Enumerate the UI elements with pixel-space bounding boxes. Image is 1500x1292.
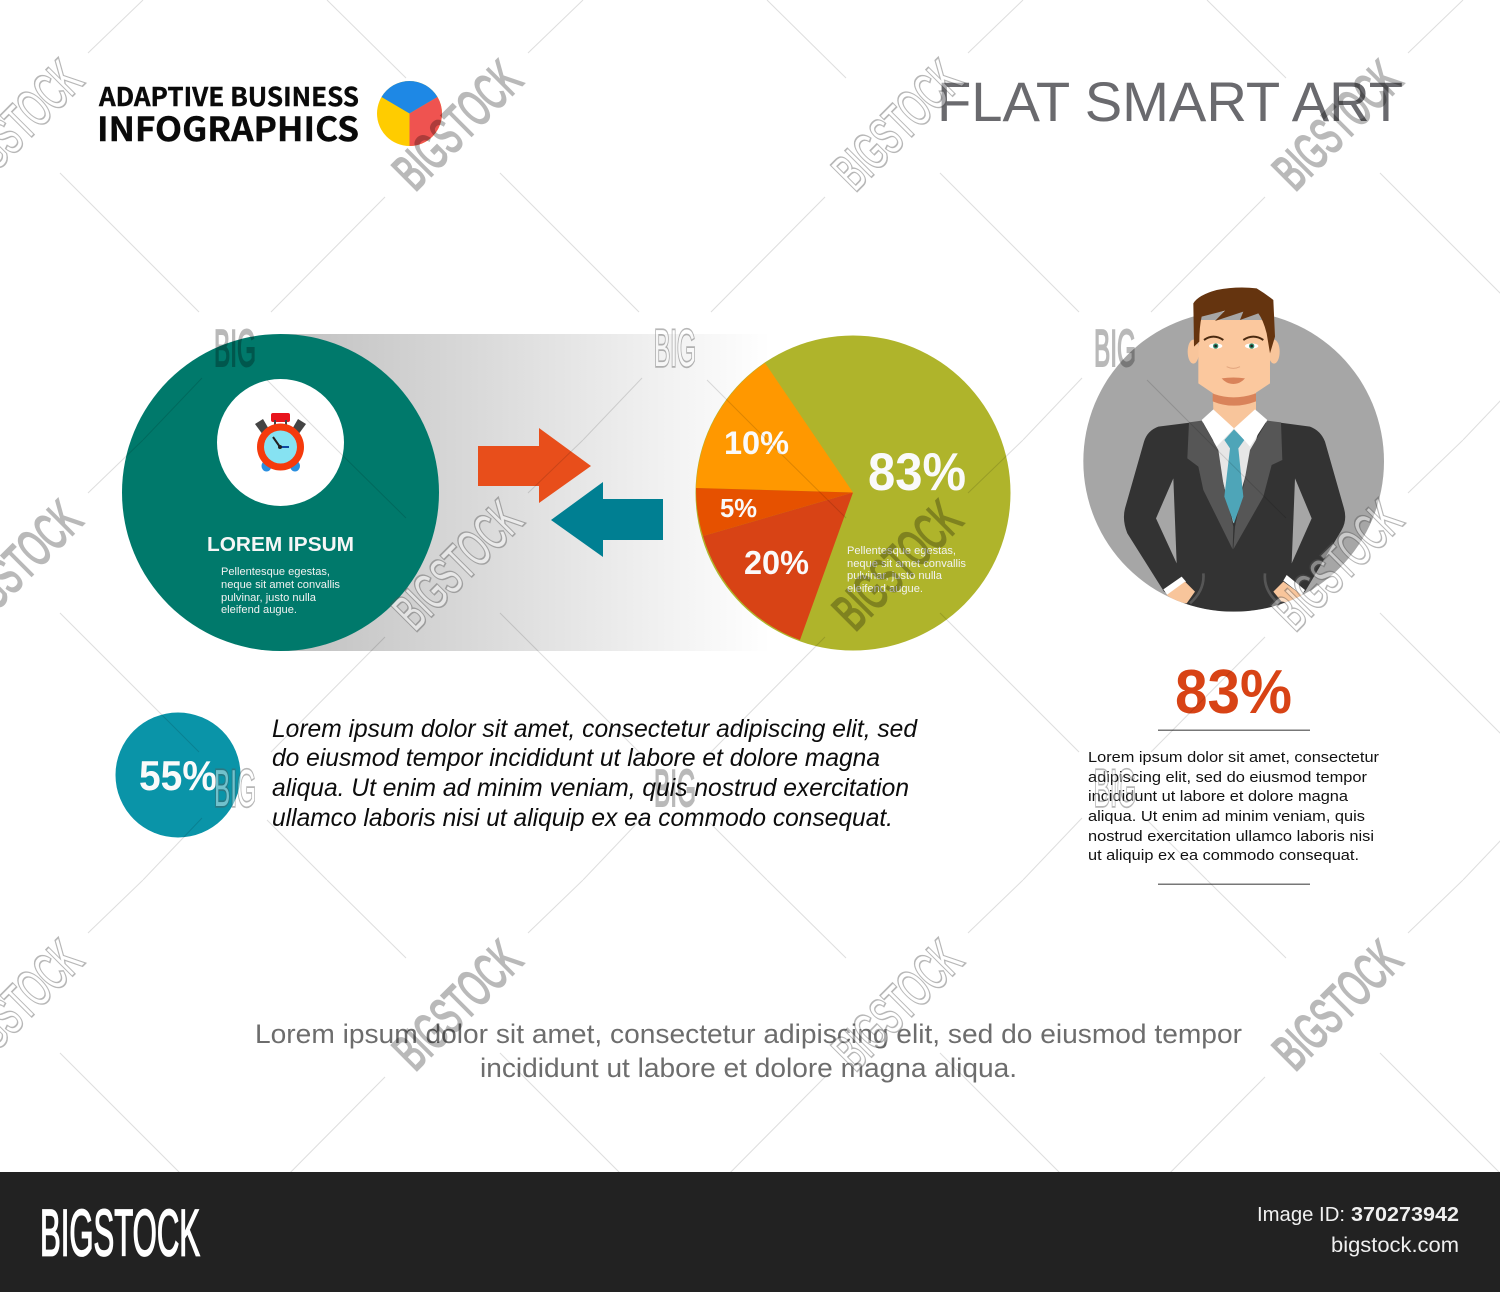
text block: bottom caption: Lorem ipsum dolor sit amet, consectetur adipiscing elit, sed do eiusmod tempor — [255, 1019, 1242, 1049]
header logo — [97, 77, 442, 151]
text block: side paragraph: nostrud exercitation ullamco laboris nisi — [1088, 828, 1374, 845]
text block: pie caption: pulvinar, justo nulla — [847, 570, 943, 582]
text block: circle caption: pulvinar, justo nulla — [221, 592, 317, 604]
text block: main paragraph: aliqua. Ut enim ad minim veniam, quis nostrud exercitation — [272, 775, 909, 802]
text block: circle caption: eleifend augue. — [221, 604, 297, 616]
slice: 20% — [703, 492, 853, 640]
text block: side paragraph: adipiscing elit, sed do eiusmod tempor — [1088, 769, 1367, 786]
label: 10%: 10% — [724, 425, 789, 461]
watermark overlay: BIG — [654, 320, 696, 378]
watermark overlay: BIG — [1094, 320, 1136, 378]
text block: circle caption — [221, 566, 340, 616]
stat circle: 55% — [116, 712, 240, 838]
heading: lorem ipsum: LOREM IPSUM — [207, 534, 354, 556]
label: 20%: 20% — [744, 544, 809, 581]
logo text — [97, 77, 359, 151]
watermark overlay: BIG — [214, 320, 256, 378]
text block: main paragraph: do eiusmod tempor incididunt ut labore et dolore magna — [272, 745, 880, 772]
watermark overlay: BIGSTOCK — [382, 930, 533, 1081]
text block: bottom caption — [255, 1019, 1242, 1083]
footer bar — [0, 1172, 1500, 1292]
pie chart — [696, 336, 1010, 650]
logo text: ADAPTIVE BUSINESS — [98, 77, 359, 114]
arrow: orange right — [478, 428, 591, 503]
site url: bigstock.com — [1331, 1233, 1459, 1257]
text block: pie caption: eleifend augue. — [847, 583, 923, 595]
icon: alarm clock — [217, 379, 344, 506]
slice: 10% — [696, 363, 853, 492]
text block: side paragraph: aliqua. Ut enim ad minim veniam, quis — [1088, 808, 1365, 825]
watermark overlay: BIGSTOCK — [822, 930, 973, 1081]
portrait: businessman — [1083, 287, 1384, 617]
watermark overlay: BIG — [214, 760, 256, 818]
watermark overlay: BIGSTOCK — [382, 490, 533, 641]
text block: side paragraph: Lorem ipsum dolor sit amet, consectetur — [1088, 749, 1379, 766]
text block: side paragraph: ut aliquip ex ea commodo consequat. — [1088, 847, 1359, 864]
panel: teal circle — [122, 334, 439, 651]
text block: bottom caption: incididunt ut labore et dolore magna aliqua. — [480, 1053, 1017, 1083]
logo text: INFOGRAPHICS — [97, 103, 359, 151]
text block: pie caption: neque sit amet convallis — [847, 558, 966, 570]
text block: pie caption — [847, 545, 966, 595]
arrow: teal left — [551, 482, 663, 557]
stat: 83%: 83% — [1175, 658, 1292, 727]
text block: main paragraph — [272, 716, 918, 832]
watermark overlay: BIGSTOCK — [1262, 930, 1413, 1081]
slice: 5% — [696, 488, 853, 536]
watermark overlay: BIG — [654, 760, 696, 818]
text block: circle caption: Pellentesque egestas, — [221, 566, 330, 578]
image id — [1257, 1203, 1459, 1226]
label: 83%: 83% — [868, 443, 966, 502]
stat circle: 55%: 55% — [139, 752, 217, 799]
footer bar: BIGSTOCK — [40, 1196, 200, 1270]
image id: 370273942 — [1351, 1203, 1459, 1226]
text block: side paragraph: incididunt ut labore et dolore magna — [1088, 788, 1349, 805]
gradient band — [280, 334, 770, 651]
text block: main paragraph: Lorem ipsum dolor sit amet, consectetur adipiscing elit, sed — [272, 716, 918, 743]
watermark overlay: BIGSTOCK — [822, 490, 973, 641]
title: FLAT SMART ART — [937, 70, 1403, 133]
watermark overlay: BIG — [1094, 760, 1136, 818]
icon: logo pie — [377, 81, 442, 146]
text block: main paragraph: ullamco laboris nisi ut aliquip ex ea commodo consequat. — [272, 805, 893, 832]
image id: Image ID: — [1257, 1203, 1345, 1226]
text block: circle caption: neque sit amet convallis — [221, 579, 340, 591]
label: 5%: 5% — [720, 495, 757, 523]
text block: pie caption: Pellentesque egestas, — [847, 545, 956, 557]
watermark overlay: BIGSTOCK — [1262, 490, 1413, 641]
text block: side paragraph — [1088, 749, 1379, 864]
